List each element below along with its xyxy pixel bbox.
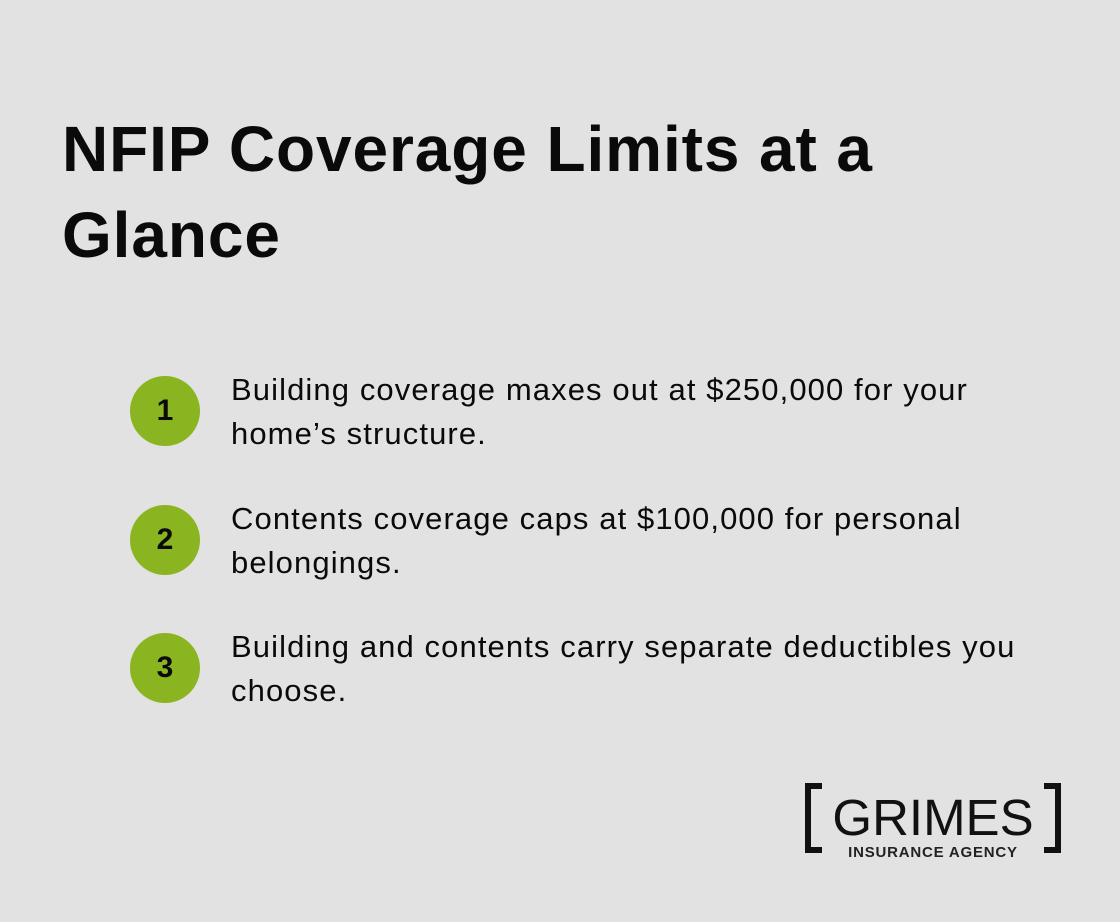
logo wordmark: GRIMES	[832, 789, 1034, 846]
badge 1: 1	[157, 394, 173, 427]
title	[62, 113, 873, 271]
item 1	[130, 372, 968, 451]
right bracket	[1044, 783, 1061, 853]
title: NFIP Coverage Limits at a	[62, 113, 873, 185]
badge 3: 3	[157, 651, 173, 684]
badge 1	[130, 376, 200, 446]
badge 2: 2	[157, 523, 173, 556]
logo	[805, 783, 1061, 861]
badge 2	[130, 505, 200, 575]
badge 3	[130, 633, 200, 703]
item 2	[130, 501, 962, 580]
text 3: choose.	[231, 673, 347, 708]
text 1: home’s structure.	[231, 416, 487, 451]
logo subtitle: INSURANCE AGENCY	[848, 844, 1018, 861]
text 2: belongings.	[231, 545, 402, 580]
left bracket	[805, 783, 822, 853]
title: Glance	[62, 199, 281, 271]
text 3: Building and contents carry separate deductibles you	[231, 629, 1015, 664]
text 2: Contents coverage caps at $100,000 for personal	[231, 501, 962, 536]
text 2	[231, 501, 962, 580]
text 1: Building coverage maxes out at $250,000 for your	[231, 372, 968, 407]
item 3	[130, 629, 1015, 708]
text 1	[231, 372, 968, 451]
text 3	[231, 629, 1015, 708]
